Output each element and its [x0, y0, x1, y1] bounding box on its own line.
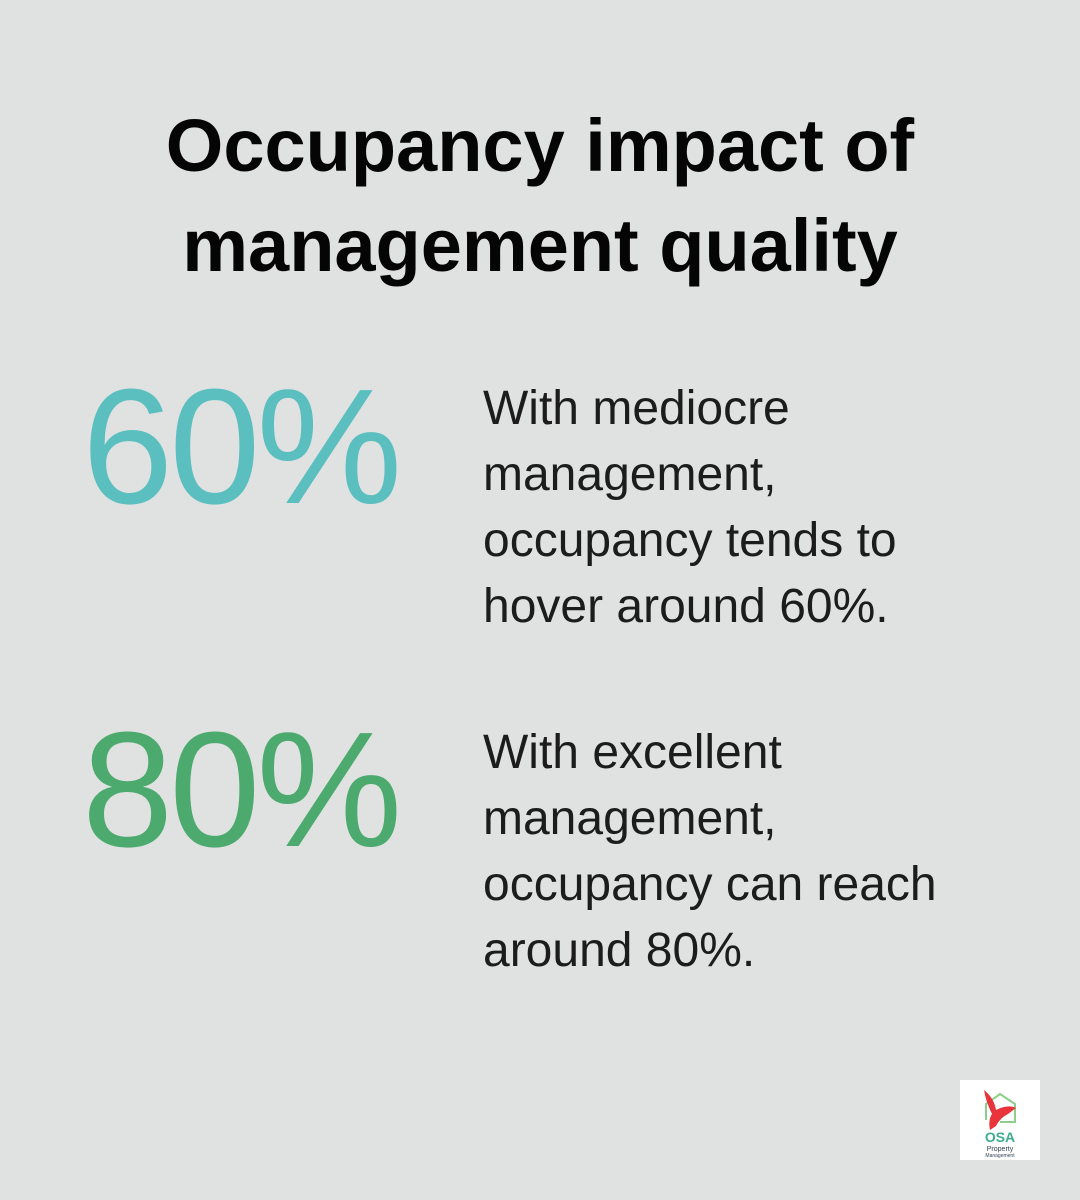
title: management quality: [182, 204, 898, 287]
text: mediocre management: hover around 60%.: [483, 580, 889, 633]
logo: Property: [987, 1146, 1014, 1153]
text: mediocre management: occupancy tends to: [483, 514, 897, 567]
text: mediocre management: management,: [483, 448, 777, 501]
stat: 80%: 80%: [82, 698, 398, 881]
text: excellent management: occupancy can reach: [483, 858, 937, 911]
logo: OSA: [985, 1129, 1015, 1145]
logo: [960, 1080, 1040, 1160]
text: excellent management: With excellent: [483, 726, 782, 779]
text: excellent management: around 80%.: [483, 924, 755, 977]
stat: 60%: 60%: [82, 355, 398, 538]
title: [166, 104, 914, 287]
text: mediocre management: With mediocre: [483, 382, 790, 435]
text: excellent management: management,: [483, 792, 777, 845]
text: mediocre management: [483, 382, 897, 633]
text: excellent management: [483, 726, 937, 977]
logo: Management: [985, 1153, 1015, 1159]
title: Occupancy impact of: [166, 104, 914, 187]
